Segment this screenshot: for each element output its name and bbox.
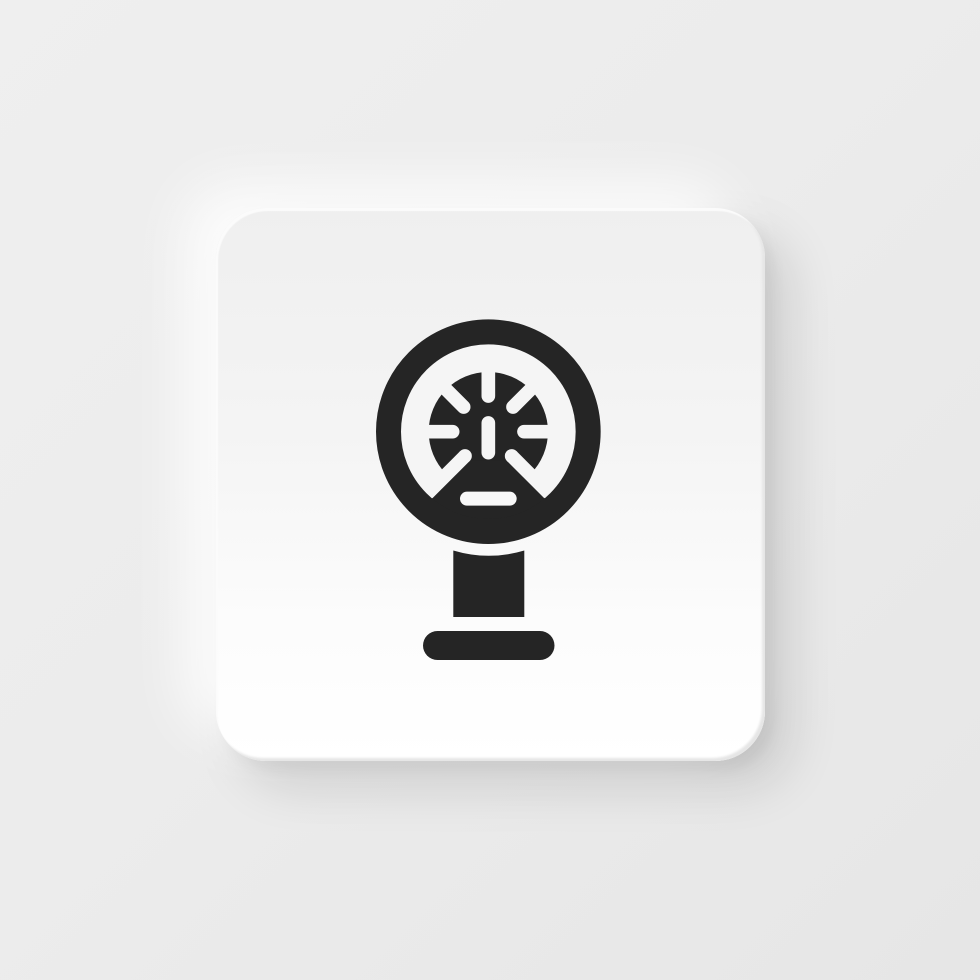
panel: neumorphic rounded card — [216, 208, 765, 761]
